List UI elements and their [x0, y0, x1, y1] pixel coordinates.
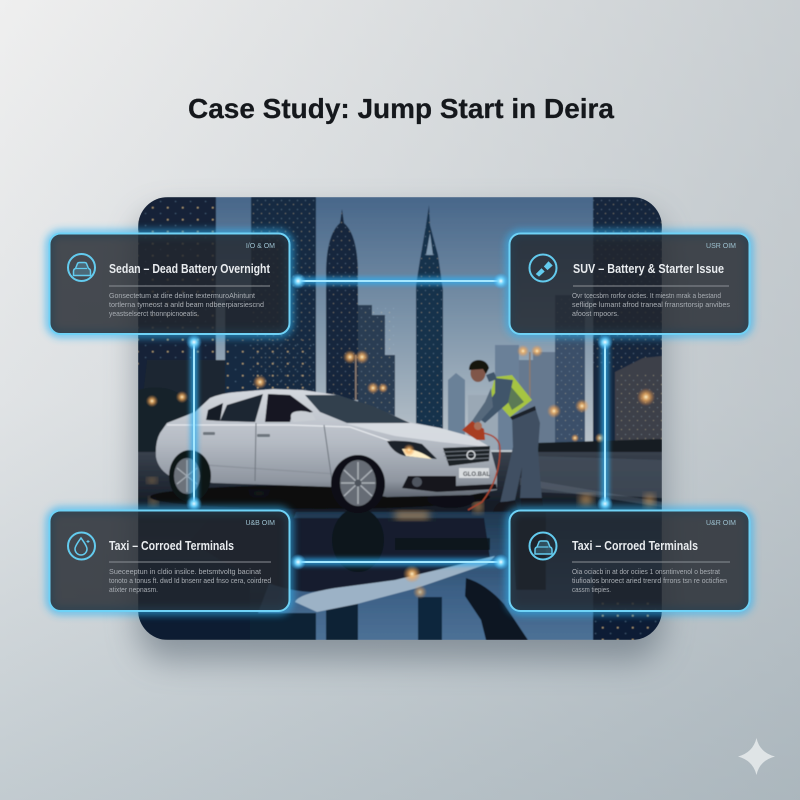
hi-vis vest: [490, 375, 532, 417]
connector: left vertical: [186, 334, 202, 512]
tag: USR OIM: [706, 243, 736, 250]
pool reflection: [138, 508, 662, 640]
icon: car: [68, 254, 95, 281]
photo shadow: [138, 214, 662, 660]
underbody shadow: [150, 485, 490, 509]
tag: U&R OIM: [706, 520, 736, 527]
tag: I/O & OM: [246, 243, 275, 250]
connector: right vertical: [597, 334, 613, 512]
tag: U&B OIM: [245, 520, 275, 527]
car reflection: [270, 518, 490, 592]
side windows: [206, 394, 313, 422]
technician: [462, 360, 543, 512]
windshield: [305, 395, 410, 423]
body text: [572, 291, 730, 318]
far arm: [472, 388, 493, 424]
vest panel: [508, 387, 524, 410]
body text: Gonsectetum at dire deline textermuroAhintunt: [109, 291, 256, 300]
heading: Taxi – Corroed Terminals: [572, 539, 698, 553]
spire tower: [416, 205, 443, 430]
hedge and left trees: [537, 438, 662, 453]
icon: battery clamps: [530, 254, 556, 282]
body text: afoost mpoors.: [572, 309, 619, 318]
panel: sedan dead battery: [50, 234, 290, 334]
silver sedan: GLO.BAL: [463, 472, 490, 478]
body text: [572, 567, 727, 594]
door handles: [203, 432, 215, 435]
right towers: [593, 197, 662, 445]
neck: [486, 372, 497, 382]
body text: Oia ociacb in at dor ociies 1 onsntinvenol o bestrat: [572, 567, 721, 576]
left dark tower: [138, 197, 226, 410]
icon: sparkle: [738, 738, 775, 775]
body text: atixter nepnasm.: [109, 585, 158, 594]
wet ground: [138, 451, 662, 614]
jump cable: [468, 433, 500, 510]
rear wheel: [169, 450, 211, 502]
body text: tonoto a tonus ft. dwd Id bnsenr aed fnso cera, coirdred: [109, 576, 271, 585]
mirror: [290, 410, 310, 418]
body text: [109, 291, 264, 318]
heading: SUV – Battery & Starter Issue: [573, 262, 724, 276]
photo: technician jump starting a silver sedan in the city at dusk: [138, 197, 662, 640]
body text: Sueceeptun in cldio insilce. betsmtvoltg bacinat: [109, 567, 262, 576]
jump pack: [462, 421, 485, 440]
grille: [443, 446, 490, 466]
front wheel: [331, 455, 385, 513]
far wheel: [428, 496, 475, 508]
body text: Ovr tcecsbrn rorfor oicties. It miestn mrak a bestand: [572, 291, 721, 300]
panel: taxi corroded terminals right: [510, 510, 750, 611]
heading: Sedan – Dead Battery Overnight: [109, 262, 271, 276]
belt: [510, 406, 536, 420]
panel: SUV battery and starter: [510, 234, 750, 334]
curved skyscraper: [326, 209, 358, 400]
second tower group: [224, 197, 316, 394]
title: Case Study: Jump Start in Deira: [188, 93, 614, 124]
icon: water drop: [68, 532, 95, 560]
distant skyline: [358, 295, 585, 450]
silver sedan: [150, 389, 497, 513]
boots: [493, 498, 543, 512]
body text: yeastselserct thonnpicnoeatis.: [109, 309, 199, 318]
car body: [156, 389, 497, 497]
heading: Taxi – Corroed Terminals: [109, 539, 234, 553]
panel: taxi corroded terminals left: [50, 510, 290, 611]
headlight: [387, 441, 437, 459]
near arm: [478, 378, 513, 423]
body text: seflidpe lumant afrod traneal frransrtorsip anvibes: [572, 300, 730, 309]
body text: tiufioalos bnroect aried trenrd frrons tsn re octicfien: [572, 576, 727, 585]
body text: tortlerna tymeost a anld beam ndbeerpiarsiescnd: [109, 300, 264, 309]
sky: [215, 197, 594, 453]
street lamps: [146, 345, 655, 443]
man reflection: [465, 510, 546, 640]
legs: [500, 407, 542, 503]
head: [470, 364, 486, 382]
body text: cassm tiepies.: [572, 585, 611, 594]
connector: top horizontal: [290, 273, 509, 289]
number plate: [459, 468, 489, 478]
body text: [109, 567, 271, 594]
ground light glints: [148, 478, 654, 519]
icon: taxi car: [530, 532, 556, 560]
lower intake: [402, 476, 497, 492]
hood highlight: [347, 423, 490, 447]
connector: bottom horizontal: [290, 554, 509, 570]
shoulder line: [167, 425, 390, 441]
